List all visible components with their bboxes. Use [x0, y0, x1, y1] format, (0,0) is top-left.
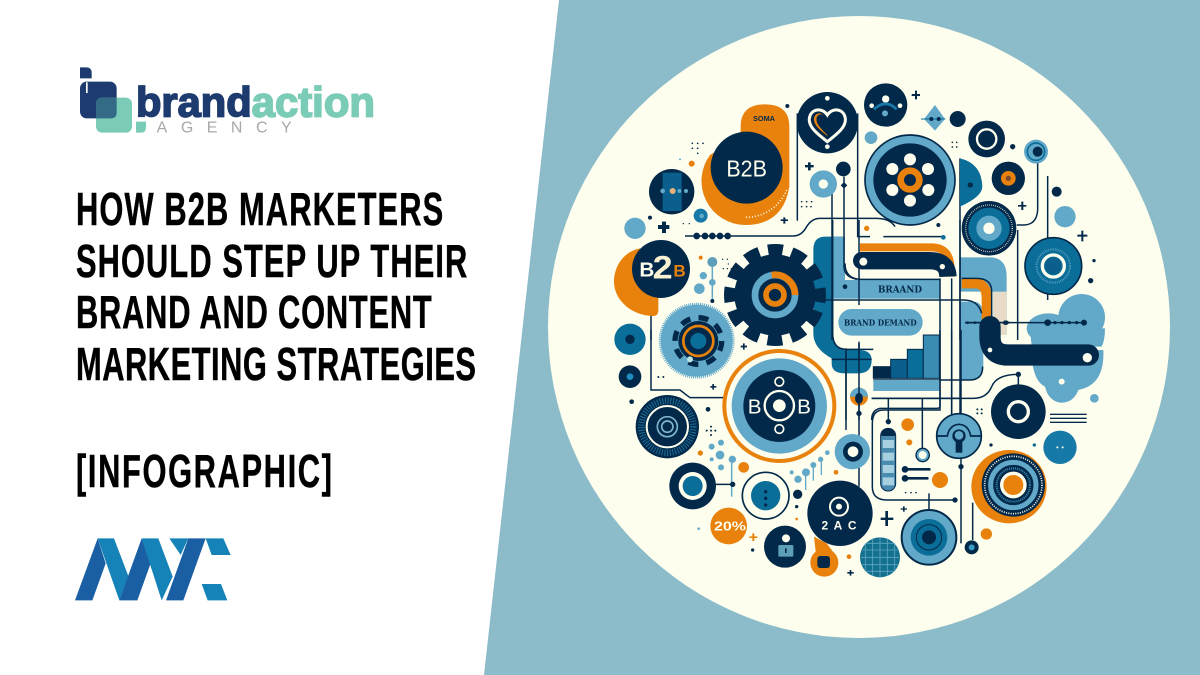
icon: B-B badge: B	[748, 395, 762, 418]
navy pipe	[853, 252, 948, 277]
title: BRAND AND CONTENT	[76, 288, 432, 339]
icon: 2 A C circle	[807, 481, 873, 546]
icon: orange backing with SOMA: SOMA	[753, 114, 776, 123]
icon: B-B badge: B	[797, 395, 811, 418]
icon: heart circle	[797, 92, 858, 153]
logo: MTC	[75, 538, 231, 600]
decorative dots and plus signs	[648, 104, 814, 269]
icon: large gear	[730, 250, 820, 340]
icon: orange backing with SOMA	[701, 104, 789, 225]
panel: cream circle	[548, 16, 1170, 638]
blue backing shapes	[813, 237, 1007, 380]
logo: brandaction agency	[80, 67, 375, 136]
icon: server pill	[881, 428, 896, 491]
icon: blue half shape	[960, 158, 982, 207]
pill: BRAND DEMAND	[838, 309, 923, 336]
bar chart	[873, 335, 939, 391]
icon: globe	[860, 537, 900, 577]
icon: B2B circle	[711, 132, 783, 204]
badge: 20%	[710, 508, 747, 544]
icon: large flower wheel	[865, 135, 955, 225]
icon: left B2B badge	[614, 240, 690, 316]
icon: ring target	[968, 121, 1005, 157]
logo: brandaction agency: AGENCY	[157, 119, 292, 136]
icon: left B2B badge: B	[673, 262, 686, 281]
icon: orange target	[992, 162, 1025, 195]
connector lines	[823, 220, 1010, 420]
orange dots	[698, 450, 851, 559]
icon: keyhole circle	[937, 414, 981, 458]
title: MARKETING STRATEGIES	[76, 340, 476, 391]
title: SHOULD STEP UP THEIR	[76, 237, 467, 288]
connector lines	[872, 330, 1018, 543]
icon: toothed blue gear	[660, 304, 733, 377]
illustration: central brand demand panel	[813, 220, 1010, 420]
icon: three lines	[1050, 414, 1087, 423]
title: HOW B2B MARKETERS	[76, 185, 443, 236]
icon: left B2B badge: B	[639, 258, 654, 281]
node on line	[850, 388, 868, 420]
icon: ticked dial	[636, 395, 699, 458]
icon: navy ring donut	[835, 434, 870, 469]
light blue clusters	[697, 440, 830, 530]
icon: big navy ring	[991, 384, 1046, 439]
icon: orange radial dial	[971, 450, 1047, 523]
icon: 2 A C circle: 2 A C	[821, 518, 857, 532]
logo: brandaction agency: action	[252, 79, 375, 126]
icon: small slider circle	[649, 169, 694, 214]
icon: donut	[810, 170, 837, 198]
navy dots and plus signs	[629, 343, 854, 576]
badge: 20%: 20%	[714, 520, 746, 534]
illustration: upper left quadrant	[614, 92, 895, 340]
subtitle: infographic tag: [INFOGRAPHIC]	[76, 447, 332, 498]
orange dots	[901, 418, 992, 540]
chain dots	[693, 233, 731, 239]
icon: blue dot	[694, 209, 708, 223]
illustration: lower right quadrant	[860, 327, 1103, 577]
navy dots	[881, 408, 993, 526]
icon: ring donut	[916, 448, 929, 462]
icon: dumbbell sliders	[902, 466, 929, 482]
icon: outlined dots circle	[742, 472, 789, 519]
icon: blue eye target	[1025, 238, 1082, 294]
navy pipe with end caps	[988, 327, 1092, 362]
icon: lens circle	[669, 463, 735, 509]
connector lines	[651, 330, 859, 497]
icon: orange tag	[810, 537, 838, 577]
icon: small navy disc	[619, 365, 641, 388]
illustration: lower left quadrant	[614, 304, 873, 577]
icon: navy pin	[836, 162, 851, 189]
icon: light blue nodes	[694, 256, 717, 303]
chain line	[966, 319, 1087, 326]
icon: cloud lower	[1032, 350, 1103, 403]
pill: BRAND DEMAND: BRAND DEMAND	[844, 317, 917, 327]
icon: blue disc	[614, 324, 646, 355]
illustration: upper right quadrant	[864, 83, 1105, 347]
icon: blue disc with dots	[1043, 431, 1077, 464]
orange connector pipes	[860, 247, 987, 333]
icon: diamond	[921, 105, 945, 131]
icon: network circle	[864, 83, 907, 127]
icon: lens disc	[902, 510, 956, 565]
connector lines	[651, 113, 895, 340]
icon: lock circle	[764, 526, 806, 568]
icon: pin node	[965, 540, 979, 554]
connector lines	[883, 153, 1048, 340]
icon: dotted target	[962, 201, 1016, 256]
decorative plus signs and dots	[912, 91, 1096, 283]
title	[76, 185, 476, 391]
icon: B2B circle: B2B	[726, 155, 767, 181]
icon: B-B badge	[724, 351, 834, 461]
icon: light dot	[624, 218, 646, 239]
icon: cloud	[1027, 294, 1105, 347]
logo: brandaction agency: brand	[136, 79, 252, 126]
icon: blue pin	[1024, 140, 1048, 164]
icon: left B2B badge: 2	[653, 249, 673, 285]
panel: blue slanted background	[484, 0, 1200, 675]
label: BRAAND: BRAAND	[878, 285, 922, 296]
